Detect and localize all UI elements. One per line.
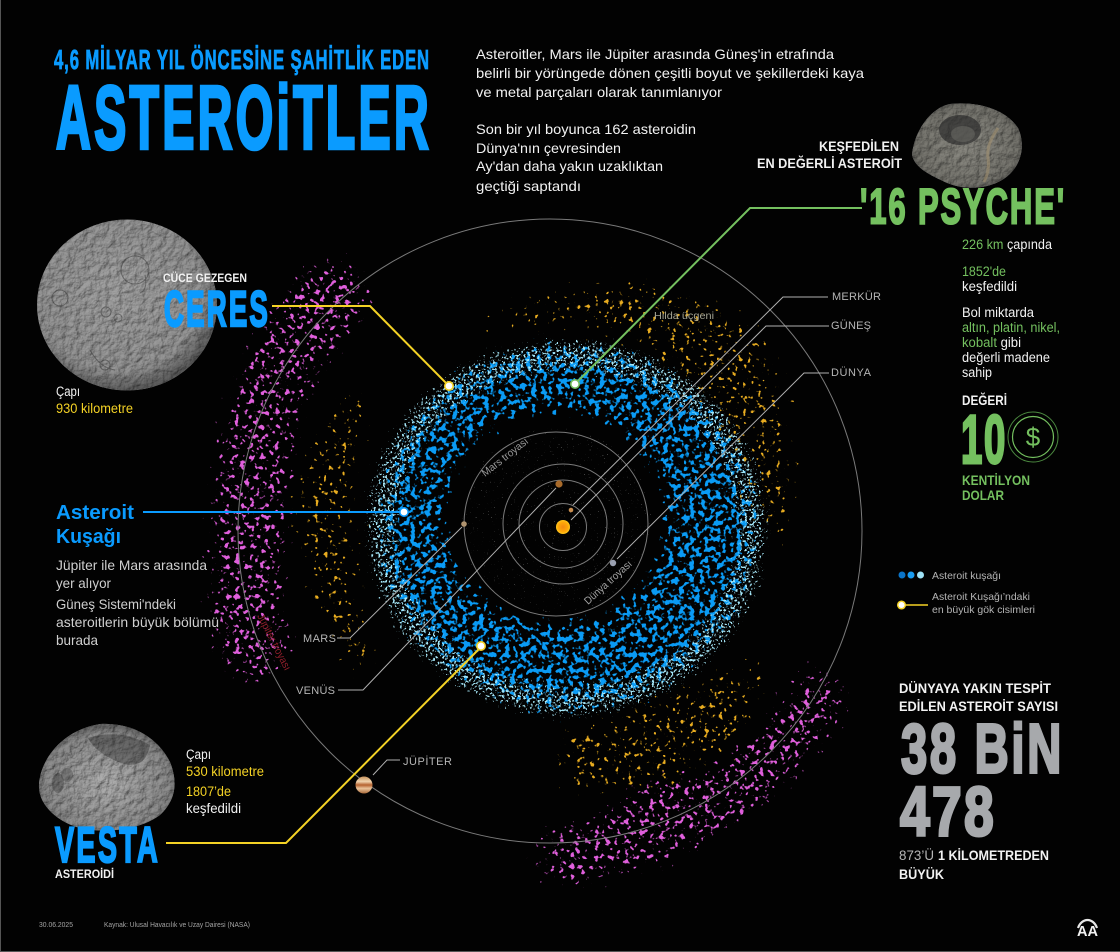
Psyche value: DEĞERİ <box>962 391 1007 408</box>
planet labels: MERKÜR <box>832 291 881 303</box>
image: Ceres <box>37 220 217 390</box>
title <box>54 44 432 168</box>
planet label leader lines <box>337 297 829 775</box>
legend: largest bodies <box>898 591 1035 616</box>
panel: near-Earth asteroid count: 873’Ü <box>899 848 934 863</box>
logo: AA: AA <box>1077 923 1098 940</box>
intro text: geçtiği saptandı <box>476 178 581 194</box>
yellow leader: Ceres <box>272 306 453 390</box>
Psyche value: 10 <box>961 401 1007 478</box>
green leader: Psyche <box>571 208 862 388</box>
panel: Vesta text: 530 kilometre <box>186 764 264 779</box>
title: 4,6 MİLYAR YIL ÖNCESİNE ŞAHİTLİK EDEN <box>54 44 430 75</box>
venus <box>555 480 563 488</box>
Psyche value <box>961 391 1030 503</box>
main belt: pale blue asteroids <box>362 335 772 721</box>
panel: asteroid belt text <box>56 502 219 648</box>
panel: 16 Psyche <box>757 139 1066 503</box>
title: ASTEROiTLER <box>56 68 432 168</box>
Psyche heading: EN DEĞERLİ ASTEROİT <box>757 156 903 171</box>
planet labels: JÜPİTER <box>403 755 452 768</box>
icon: dollar coin <box>1008 412 1058 462</box>
blue leader: asteroid belt <box>143 508 408 516</box>
footer: Kaynak: Ulusal Havacılık ve Uzay Dairesi (NASA) <box>104 922 250 929</box>
jupiter <box>356 776 372 794</box>
trojan and Hilda labels: Jüpiter troyası <box>254 612 293 673</box>
panel: Vesta text: VESTA <box>55 817 160 873</box>
Psyche facts: keşfedildi <box>962 279 1017 294</box>
legend: largest bodies: Asteroit Kuşağı’ndaki <box>932 591 1030 603</box>
Psyche facts: değerli madene <box>962 350 1050 365</box>
panel: asteroid belt text: Kuşağı <box>56 526 121 548</box>
main belt: blue asteroids <box>372 338 762 716</box>
planet labels <box>296 291 881 768</box>
legend <box>898 570 1035 616</box>
Psyche facts: altın, platin, nikel, <box>962 320 1060 335</box>
panel: Ceres text: CÜCE GEZEGEN <box>163 270 247 285</box>
planet labels: GÜNEŞ <box>831 320 871 332</box>
Psyche facts: 226 km çapında <box>962 237 1052 252</box>
Psyche facts: Bol miktarda <box>962 305 1034 320</box>
intro text: belirli bir yörüngede dönen çeşitli boyut ve şekillerdeki kaya <box>476 65 864 81</box>
panel: asteroid belt text: Jüpiter ile Mars arasında <box>56 557 207 573</box>
planet labels: VENÜS <box>296 685 335 697</box>
panel: Vesta text: Çapı <box>186 747 211 762</box>
icon: dollar coin: $ <box>1026 422 1041 452</box>
Psyche heading <box>757 139 903 171</box>
Psyche facts: 1852'de <box>962 264 1006 279</box>
mars <box>461 521 467 527</box>
panel: Vesta text: keşfedildi <box>186 801 241 816</box>
trojan and Hilda labels <box>254 310 714 673</box>
solar system bodies <box>356 480 616 794</box>
planet labels: MARS <box>303 633 336 645</box>
footer: 30.06.2025 <box>39 922 73 929</box>
panel: Ceres text: 930 kilometre <box>56 401 133 416</box>
panel: Ceres text: CERES <box>164 281 270 337</box>
trojan and Hilda labels: Hilda üçgeni <box>654 310 714 322</box>
panel: Ceres text: Çapı <box>56 384 80 399</box>
panel: asteroid belt text: asteroitlerin büyük bölümü <box>56 614 219 630</box>
intro text: Ay'dan daha yakın uzaklıktan <box>476 158 663 174</box>
intro text: Son bir yıl boyunca 162 asteroidin <box>476 121 696 137</box>
asteroid field <box>247 274 818 882</box>
panel: Vesta text: 1807’de <box>186 784 231 799</box>
Psyche facts: kobalt gibi <box>962 335 1021 350</box>
image: 16 Psyche <box>912 103 1022 188</box>
panel: asteroid belt text: Güneş Sistemi'ndeki <box>56 596 176 612</box>
intro text: ve metal parçaları olarak tanımlanıyor <box>476 84 722 100</box>
image: Vesta <box>39 724 175 831</box>
trojan asteroids: pink clusters <box>247 295 818 882</box>
panel: asteroid belt text: yer alıyor <box>56 575 111 591</box>
legend: belt dots: Asteroit kuşağı <box>932 570 1001 582</box>
planet labels: DÜNYA <box>831 367 872 379</box>
panel: Ceres text <box>56 270 270 416</box>
Psyche heading: KEŞFEDİLEN <box>819 139 899 154</box>
legend: largest bodies: en büyük gök cisimleri <box>932 604 1035 616</box>
yellow leader: Vesta <box>166 642 485 843</box>
Psyche value: KENTİLYON <box>962 472 1030 488</box>
panel: Vesta text <box>55 747 264 881</box>
Hilda group: orange scatter <box>288 274 800 801</box>
panel: near-Earth asteroid count: EDİLEN ASTEROİT SAYISI <box>899 699 1058 714</box>
footer <box>39 922 250 929</box>
panel: near-Earth asteroid count <box>899 681 1064 882</box>
panel: near-Earth asteroid count: BÜYÜK <box>899 867 944 882</box>
panel: asteroid belt text: burada <box>56 632 98 648</box>
earth <box>610 560 616 566</box>
mercury <box>569 508 573 512</box>
Psyche facts <box>962 237 1060 380</box>
panel: near-Earth asteroid count: 478 <box>900 772 996 850</box>
Psyche facts: sahip <box>962 365 992 380</box>
panel: asteroid belt text: Asteroit <box>56 502 134 524</box>
panel: near-Earth asteroid count: DÜNYAYA YAKIN TESPİT <box>899 681 1052 696</box>
panel: near-Earth asteroid count: 1 KİLOMETREDEN <box>938 848 1049 863</box>
orbits <box>238 219 862 843</box>
intro text: Dünya'nın çevresinden <box>476 140 621 156</box>
inner scattered bodies <box>461 427 651 617</box>
intro text <box>476 46 864 194</box>
sun <box>556 520 570 534</box>
intro text: Asteroitler, Mars ile Jüpiter arasında Güneş'in etrafında <box>476 46 834 62</box>
panel: Vesta text: ASTEROİDİ <box>55 866 114 881</box>
trojan and Hilda labels: Dünya troyası <box>582 558 635 607</box>
Psyche value: DOLAR <box>962 487 1004 503</box>
trojan and Hilda labels: Mars troyası <box>479 435 531 479</box>
